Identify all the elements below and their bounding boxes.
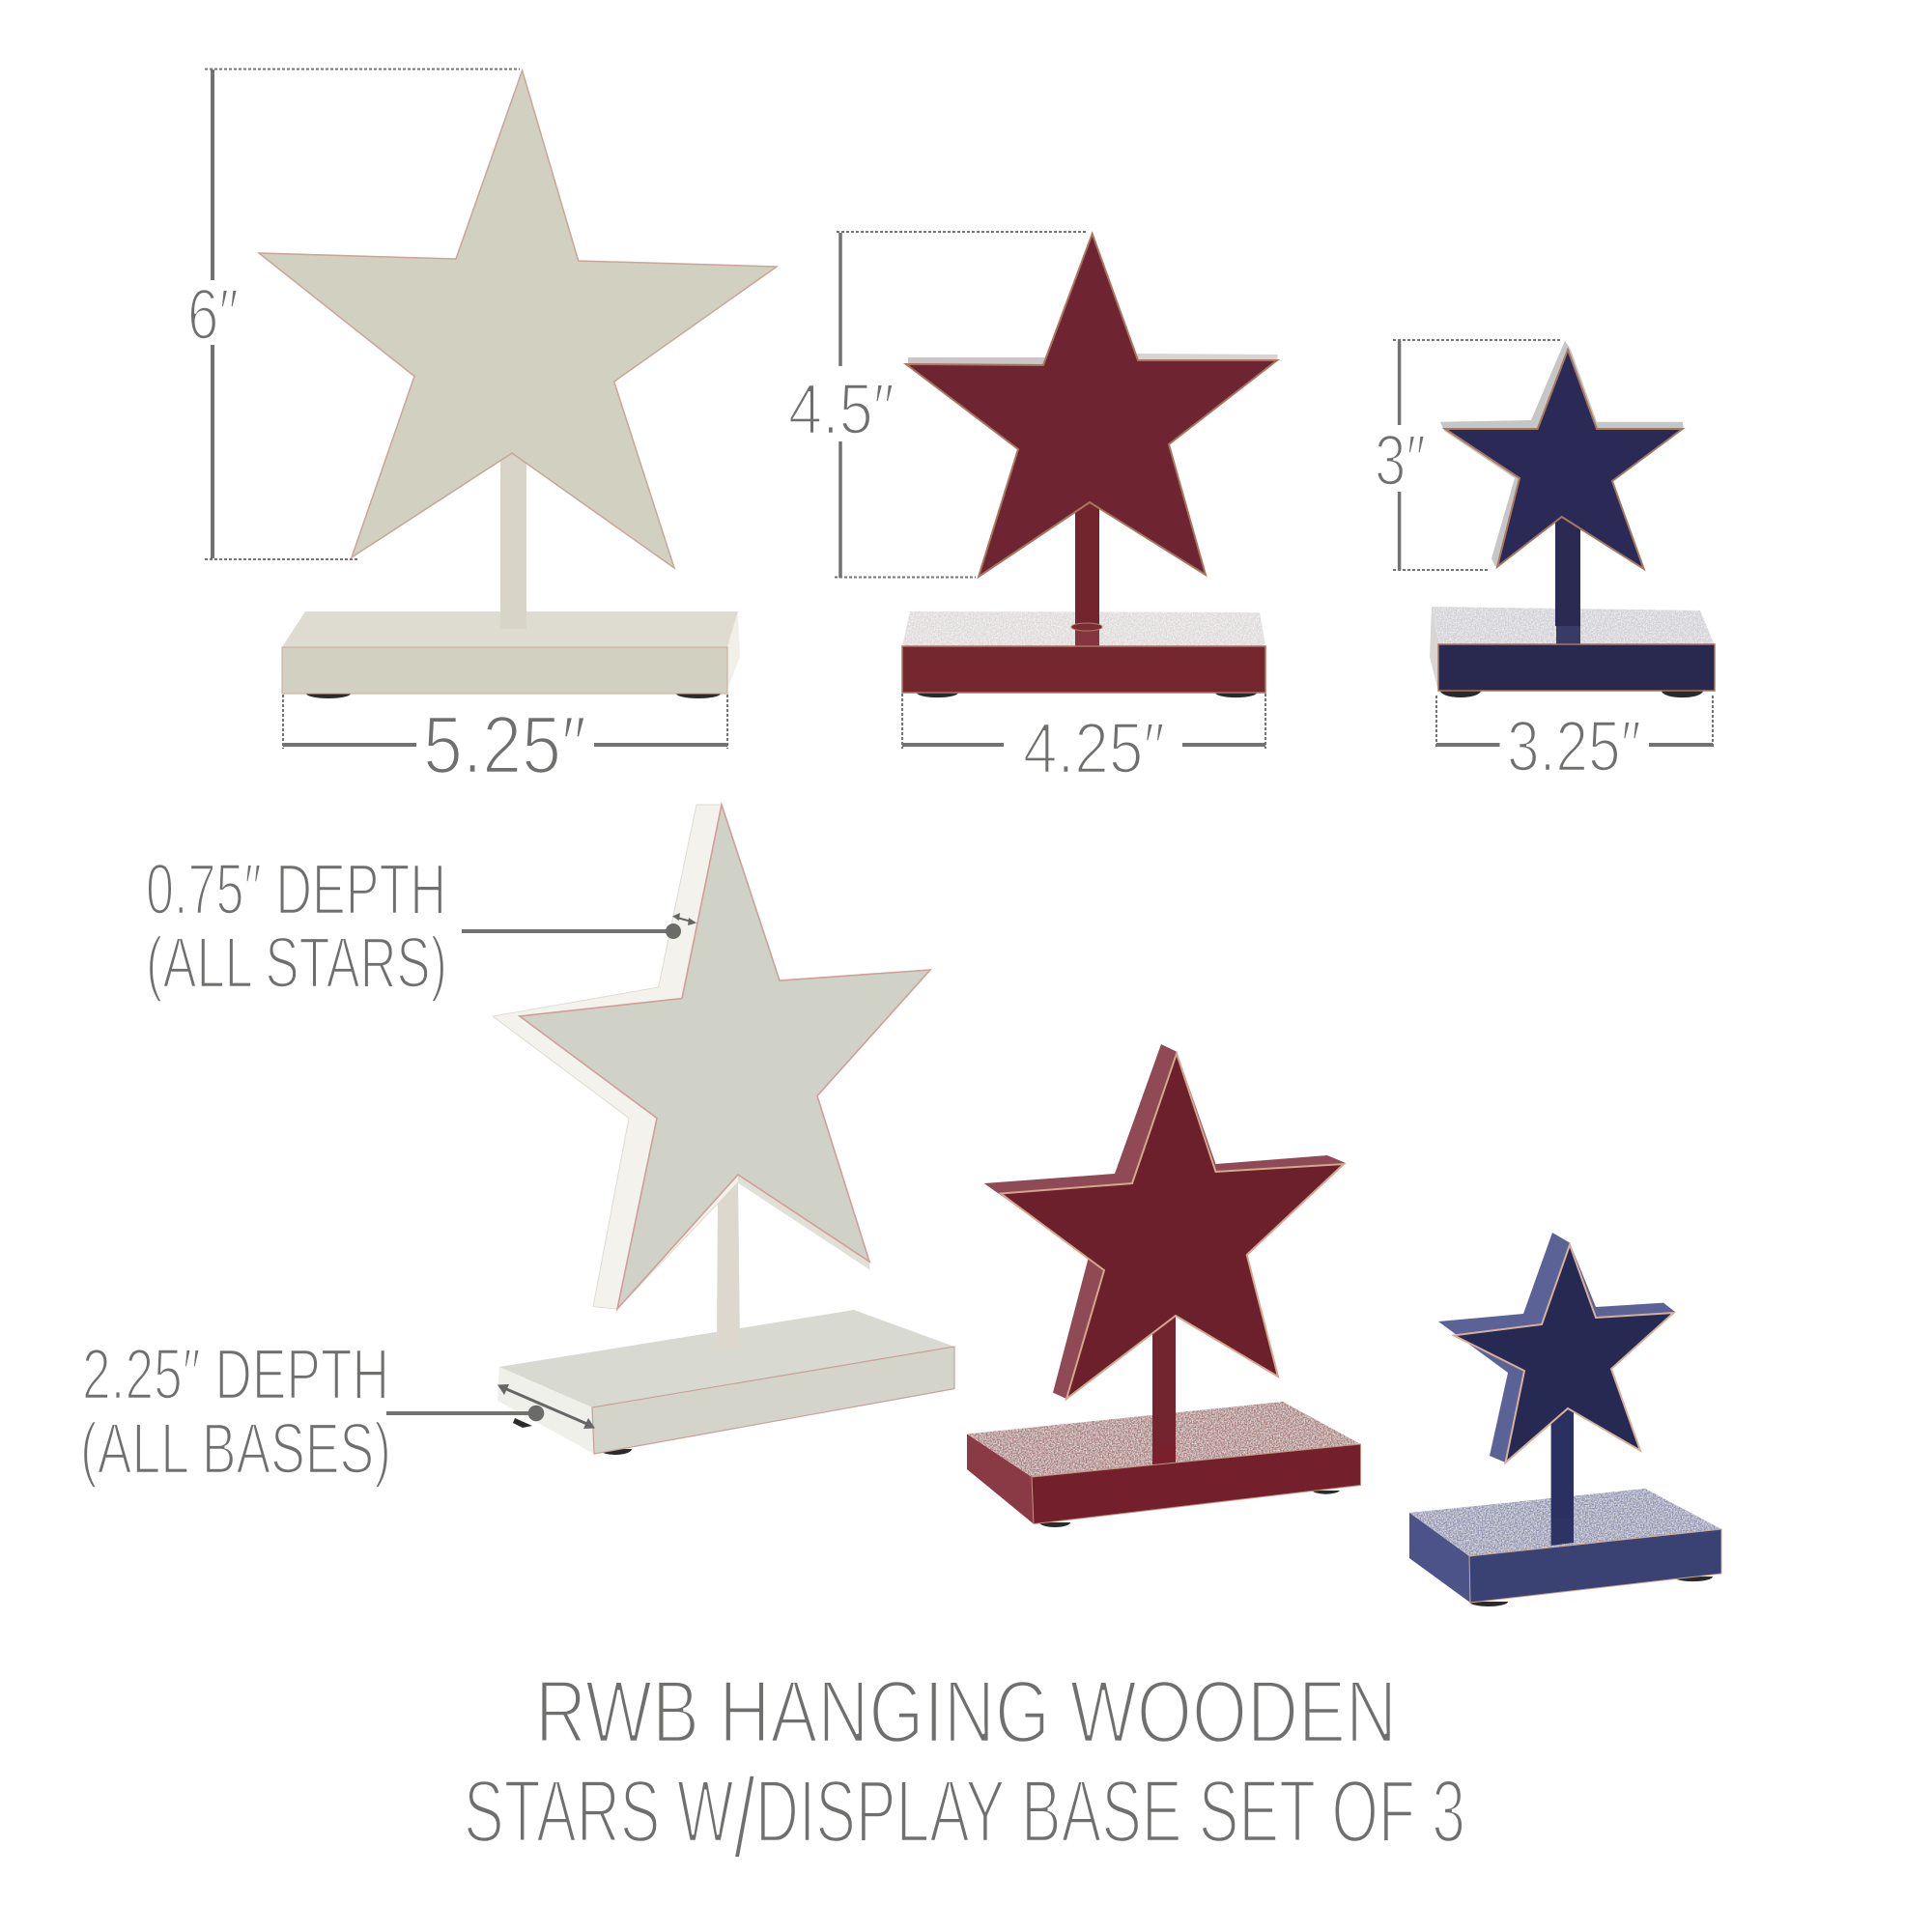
star depth label line 2: (ALL STARS) xyxy=(146,923,447,1003)
base depth label line 2: (ALL BASES) xyxy=(80,1408,391,1489)
angled white base front xyxy=(592,1347,954,1454)
angled white base left side xyxy=(497,1367,594,1454)
dimension: 5.25 inch width xyxy=(283,695,727,790)
dimension: 4.5 inch height xyxy=(788,232,1087,578)
base depth leader line xyxy=(386,1411,536,1415)
label 4.25 in: 4.25″ xyxy=(1023,708,1165,788)
white base top xyxy=(282,611,738,647)
label 3.25 in: 3.25″ xyxy=(1507,706,1641,786)
blue base top xyxy=(1432,607,1714,644)
red stem collar xyxy=(1071,623,1102,631)
title line 2: DISPLAY BASE SET OF 3 xyxy=(755,1762,1465,1861)
callout: base depth xyxy=(82,1334,595,1429)
product: large white star, angled view xyxy=(493,805,954,1455)
white base side xyxy=(727,611,740,690)
red base top xyxy=(902,611,1265,646)
dimension: 3.25 inch width xyxy=(1436,696,1713,786)
blue base front xyxy=(1438,644,1715,691)
angled white base feet xyxy=(513,1389,923,1455)
title line 2: STARS W xyxy=(464,1762,862,1861)
angled white star lower arm band xyxy=(738,1175,869,1269)
angled red base left side xyxy=(967,1434,1034,1524)
angled red star side xyxy=(984,1044,1345,1399)
red star silver edge right xyxy=(1137,354,1278,360)
white stem xyxy=(500,446,526,629)
blue base feet xyxy=(1440,691,1703,697)
blue stem reflection xyxy=(1556,625,1580,644)
star depth leader line xyxy=(462,929,673,933)
angled red stem reflection xyxy=(1152,1444,1176,1467)
angled blue base left side xyxy=(1409,1513,1470,1603)
red star face xyxy=(906,234,1277,577)
product: medium red star, angled view xyxy=(967,1044,1360,1527)
angled blue base top xyxy=(1409,1489,1721,1556)
base depth arrow xyxy=(497,1384,595,1429)
dimension: 3 inch height xyxy=(1375,340,1560,570)
star depth dot xyxy=(666,923,681,939)
base depth label line 1: 2.25″ DEPTH xyxy=(82,1334,389,1414)
label 5.25 in: 5.25″ xyxy=(423,699,586,790)
product: large white star, front view xyxy=(259,71,777,698)
white base feet xyxy=(306,694,721,698)
label 3 in: 3″ xyxy=(1375,420,1426,500)
label 4.5 in: 4.5″ xyxy=(788,369,895,449)
red star silver edge left xyxy=(908,357,1045,365)
dimension: 4.25 inch width xyxy=(902,694,1265,788)
angled red star face xyxy=(1001,1054,1344,1399)
callout: star depth xyxy=(146,849,696,939)
product: small blue star, angled view xyxy=(1409,1233,1721,1606)
angled blue star face xyxy=(1454,1245,1673,1463)
product: medium red star, front view xyxy=(902,234,1278,697)
white star shape xyxy=(259,71,777,568)
title xyxy=(464,1663,1465,1882)
dimension: 6 inch height xyxy=(187,70,520,559)
angled red stem xyxy=(1152,1314,1176,1444)
angled white stem xyxy=(717,1174,740,1349)
angled blue base feet xyxy=(1469,1577,1713,1606)
label 6 in: 6″ xyxy=(187,274,239,355)
star depth arrow xyxy=(672,913,696,925)
angled white star face xyxy=(520,805,930,1309)
angled red base feet xyxy=(1039,1491,1340,1527)
title line 1: RWB HANGING WOODEN xyxy=(535,1663,1397,1762)
angled blue stem reflection xyxy=(1551,1519,1574,1546)
white base front xyxy=(282,647,727,694)
blue base left side xyxy=(1430,607,1438,692)
red stem xyxy=(1075,497,1099,628)
angled red base front xyxy=(1032,1444,1360,1524)
angled white star side xyxy=(493,805,930,1309)
title line 2: / xyxy=(734,1754,755,1882)
red base feet xyxy=(917,693,1257,697)
star depth label line 1: 0.75″ DEPTH xyxy=(146,849,446,929)
blue star face xyxy=(1445,350,1683,569)
red base front xyxy=(902,646,1265,693)
blue stem xyxy=(1555,512,1580,626)
product: small blue star, front view xyxy=(1430,341,1715,697)
blue star silver edge xyxy=(1440,341,1684,569)
base depth dot xyxy=(528,1406,544,1421)
angled blue base front xyxy=(1469,1529,1721,1603)
red stem reflection xyxy=(1075,628,1099,646)
angled blue star side xyxy=(1438,1233,1675,1463)
angled red base top xyxy=(967,1402,1360,1477)
angled blue stem xyxy=(1551,1401,1574,1519)
angled white base top xyxy=(499,1310,954,1407)
